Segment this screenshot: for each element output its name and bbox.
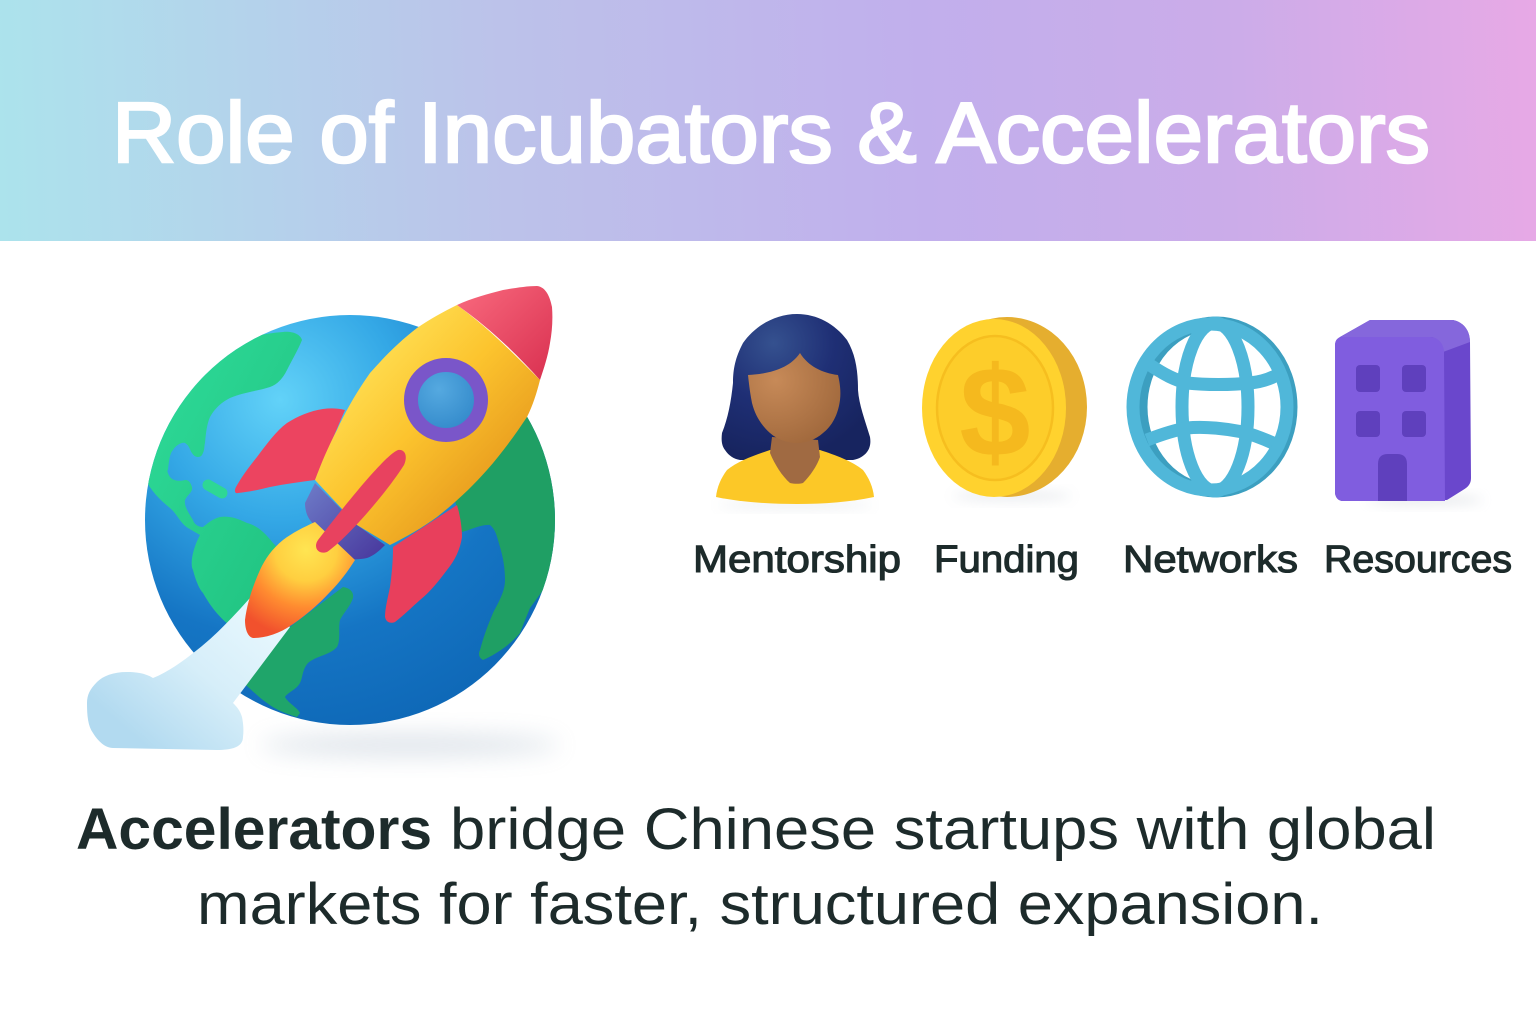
caption line 2: markets for faster, structured expansion. — [197, 872, 1323, 937]
smoke trail — [87, 598, 290, 750]
nose cone — [457, 286, 552, 380]
header banner — [0, 0, 1536, 241]
icon: funding — [922, 317, 1087, 500]
caption line 1: bridge Chinese startups with global — [450, 797, 1436, 862]
left fin — [235, 408, 345, 493]
small island — [208, 485, 222, 493]
caption bold lead: Accelerators — [76, 797, 432, 862]
face — [748, 353, 840, 443]
rocket — [235, 286, 552, 638]
icon: mentorship — [716, 314, 874, 508]
window — [411, 365, 481, 435]
body — [315, 305, 540, 545]
title: Role of Incubators & Accelerators — [112, 86, 1430, 181]
icon labels — [693, 539, 1512, 581]
label: resources: Resources — [1324, 539, 1512, 581]
neck — [770, 437, 820, 484]
icon: resources — [1335, 320, 1483, 504]
center fin — [316, 450, 406, 553]
caption — [76, 797, 1436, 937]
right fin — [385, 505, 462, 623]
engine band — [305, 483, 385, 559]
label: mentorship: Mentorship — [693, 539, 901, 581]
shoulders — [716, 450, 874, 504]
illustration: rocket launching past globe — [87, 286, 565, 756]
flame — [245, 522, 355, 638]
globe — [144, 315, 565, 725]
icon: networks — [1133, 323, 1291, 491]
label: funding: Funding — [934, 539, 1079, 581]
icon: funding: $ — [959, 341, 1031, 484]
label: networks: Networks — [1123, 539, 1298, 581]
